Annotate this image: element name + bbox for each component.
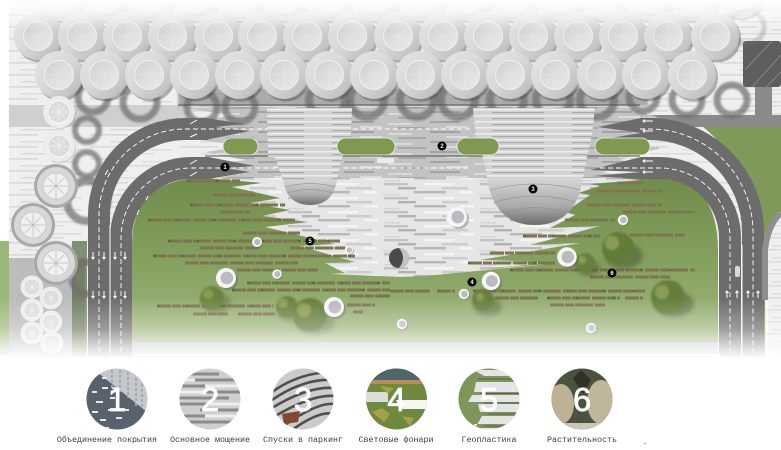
left service lane: [9, 258, 85, 358]
green pills: [223, 138, 650, 155]
upper left walkway: [9, 105, 189, 127]
white base under fade: [0, 358, 781, 450]
numeral 1: 1: [108, 381, 126, 418]
left lawn strip: [0, 241, 9, 356]
bottom fade: [0, 298, 781, 359]
left column of domes: [11, 96, 78, 285]
marker 1: [220, 162, 230, 172]
label 4: Световые фонари: [358, 435, 434, 445]
road divider lines: [110, 225, 767, 358]
top fade: [0, 0, 781, 30]
skylights: [216, 207, 629, 334]
paving wedge with spiked edge: [205, 178, 640, 277]
marker 4: [468, 278, 476, 286]
small domes lower left: [20, 275, 64, 355]
outer road: [99, 118, 753, 360]
marker 5: [306, 236, 314, 246]
marker 3: 3: [531, 187, 535, 193]
descent 1: paved funnel: [267, 108, 352, 205]
label 6: Растительность: [547, 435, 617, 445]
numeral 2: 2: [201, 381, 219, 418]
numeral 3: 3: [294, 381, 312, 418]
legend item 4: [358, 368, 434, 445]
dark sphere skylight: [389, 248, 409, 268]
hedge rows: [148, 181, 695, 314]
legend item 2: [170, 368, 250, 445]
marker 3: [528, 184, 538, 194]
stray mark: [644, 443, 646, 444]
car on road: [735, 266, 740, 277]
shadow rings: [67, 10, 764, 294]
label 1: Объединение покрытия: [57, 435, 157, 445]
descent 1 bowl: [283, 180, 337, 205]
paved ground: [9, 0, 781, 360]
top row of domes: [36, 0, 766, 24]
marker 2: [438, 142, 446, 150]
marker 6: 6: [610, 271, 614, 277]
label 3: Спуски в паркинг: [263, 435, 343, 445]
legend item 1: [57, 368, 157, 445]
label 5: Геопластика: [461, 435, 517, 445]
pillar stripes and walls across plaza: [178, 105, 640, 156]
label 2: Основное мощение: [170, 435, 250, 445]
legend item 3: [263, 368, 343, 445]
top right service road: [640, 85, 781, 127]
marker 1: 1: [223, 165, 227, 171]
central plaza paving: [178, 107, 665, 180]
lower row of domes: [35, 51, 718, 102]
numeral 6: 6: [573, 381, 591, 418]
vehicle marking on plaza: [377, 158, 394, 163]
numeral 5: 5: [480, 381, 498, 418]
marker 4: 4: [470, 280, 474, 286]
tree shadow on left lane: [72, 241, 87, 356]
road arrows: [92, 120, 760, 350]
lawn: [132, 178, 718, 352]
marker 5: 5: [308, 239, 312, 245]
inner road: [121, 157, 730, 360]
legend item 6: [547, 368, 617, 445]
descent 2: paved funnel: [473, 108, 595, 225]
numeral 4: 4: [387, 381, 406, 418]
shadow band under domes: [178, 88, 648, 106]
legend item 5: [458, 368, 520, 445]
middle row of domes: [14, 12, 741, 62]
marker 6: [608, 268, 616, 278]
bottom paved strip: [132, 342, 720, 358]
right curved service road: [765, 213, 781, 300]
descent 2 bowl: [487, 178, 583, 225]
top right dark pad: [743, 41, 781, 87]
top right lawn: [703, 127, 781, 358]
trees: [200, 232, 694, 335]
marker 2: 2: [440, 144, 444, 150]
